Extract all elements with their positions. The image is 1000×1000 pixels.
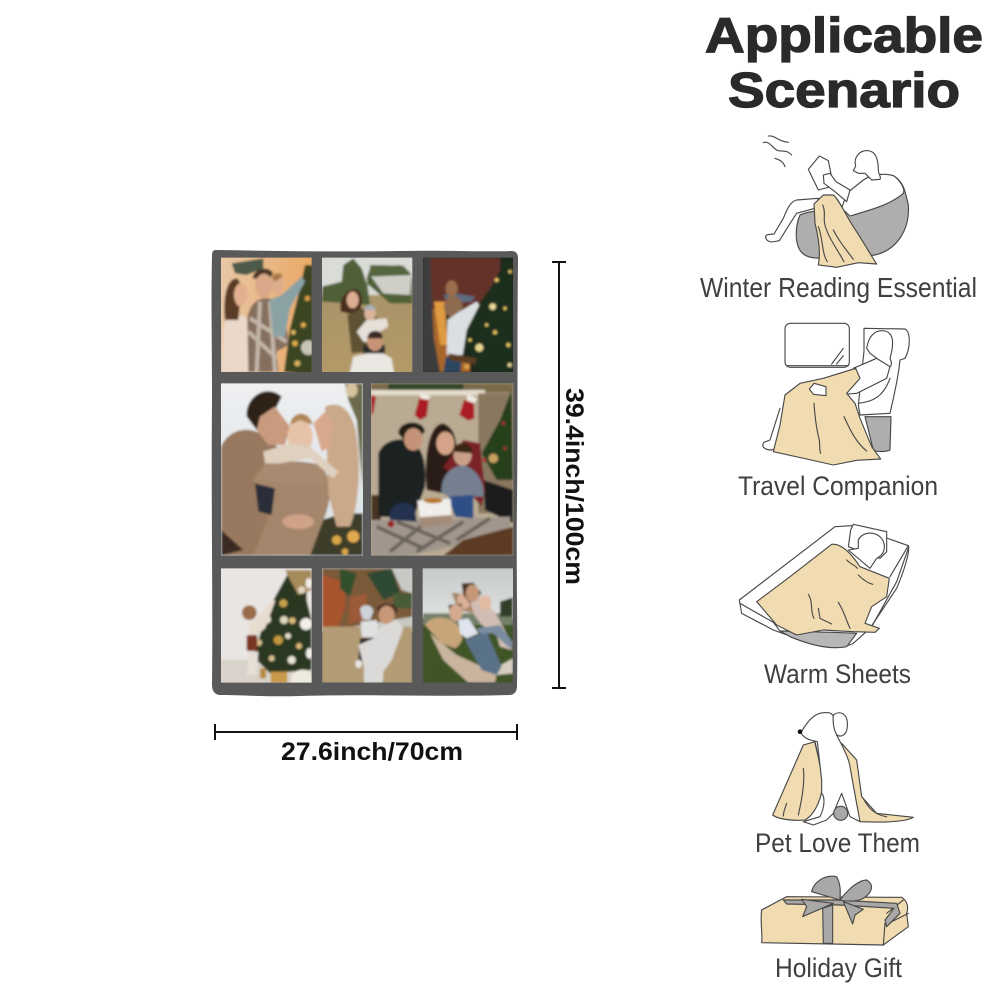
photo: man lifting child at tree [420, 255, 515, 375]
infographic canvas [212, 16, 982, 982]
photo: child at Christmas tree [218, 565, 315, 685]
photos row 3 [218, 565, 515, 685]
title: Scenario [728, 64, 960, 118]
scenario: warm sheets [739, 524, 911, 689]
label: Travel Companion [738, 471, 938, 501]
blanket fabric [212, 250, 518, 696]
icon: person under blanket on plane seat [763, 323, 909, 465]
label: Winter Reading Essential [700, 272, 977, 303]
label: Pet Love Them [755, 828, 920, 858]
photo: family decorating tree [221, 258, 312, 372]
title [705, 9, 983, 118]
icon: gift box with ribbon [761, 876, 908, 945]
icon: person reading on beanbag [763, 136, 908, 267]
photo: man with baby in autumn field [320, 565, 415, 683]
scenario: travel companion [738, 323, 938, 501]
icon: dog wrapped in blanket [773, 713, 913, 825]
scenario: pets [755, 713, 920, 858]
title: Applicable [705, 9, 983, 63]
photo: family by fireplace [368, 380, 517, 560]
scenario: winter reading [700, 136, 977, 303]
width value: 27.6inch/70cm [281, 738, 463, 766]
label: Warm Sheets [764, 659, 911, 689]
photos row 1 [218, 255, 515, 375]
photos row 2 [218, 380, 517, 560]
panel: photo blanket [212, 250, 518, 696]
photo: family in field [320, 255, 415, 375]
label: Holiday Gift [775, 953, 902, 983]
dimension: height [552, 262, 588, 688]
icon: person sleeping in bed [739, 524, 909, 648]
photo: parents kissing baby [218, 380, 365, 560]
dimension: width [215, 724, 517, 766]
scenario: holiday gift [761, 876, 908, 983]
height value: 39.4inch/100cm [560, 388, 588, 585]
photo: family with dog on bench [420, 565, 515, 683]
